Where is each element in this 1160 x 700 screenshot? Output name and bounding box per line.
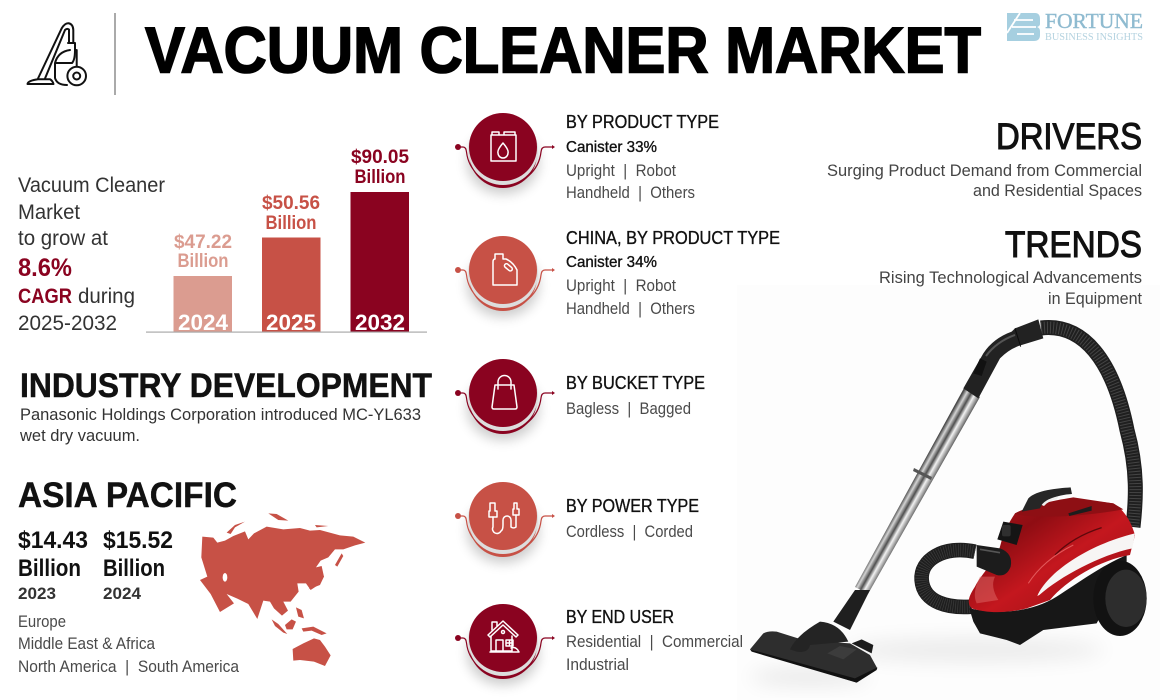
icon: detergent bottle bbox=[493, 254, 517, 285]
segment: by end user: Residential | Commercial bbox=[566, 633, 743, 651]
segment: by end user: BY END USER bbox=[566, 607, 674, 627]
stat: 2023 value bbox=[18, 527, 88, 603]
bar chart: market size: $50.56 bbox=[262, 193, 320, 214]
icon: canister with drop bbox=[491, 132, 516, 161]
text block: trends detail bbox=[879, 268, 1142, 308]
segment: china by product type: Upright | Robot bbox=[566, 277, 676, 295]
bar chart: market size: Billion bbox=[178, 251, 228, 272]
bar chart: market size: 2024 bbox=[178, 310, 229, 335]
segment: by power type: BY POWER TYPE bbox=[566, 496, 699, 516]
header divider bbox=[114, 13, 116, 95]
bar chart: market size bbox=[146, 147, 427, 335]
text block: market growth: during bbox=[78, 285, 135, 308]
text block: drivers detail: Surging Product Demand from Commercial bbox=[827, 161, 1142, 180]
segment: china by product type: CHINA, BY PRODUCT TYPE bbox=[566, 228, 780, 248]
text block: drivers detail: and Residential Spaces bbox=[973, 181, 1142, 200]
bar chart: market size: $90.05 bbox=[351, 147, 409, 168]
text block: market growth: CAGR bbox=[18, 285, 72, 308]
segment: by bucket type bbox=[455, 359, 705, 440]
text block: industry development detail: Panasonic Holdings Corporation introduced MC-YL633 bbox=[20, 405, 421, 424]
stat: 2023 value: $14.43 bbox=[18, 527, 88, 554]
bar chart: market size: Billion bbox=[266, 213, 316, 234]
stat: 2024 value: 2024 bbox=[103, 584, 142, 603]
segment: china by product type: Handheld | Others bbox=[566, 300, 695, 318]
text block: trends detail: in Equipment bbox=[1048, 289, 1142, 308]
hose handle bbox=[963, 319, 1043, 398]
stat: 2023 value: 2023 bbox=[18, 584, 56, 603]
text block: drivers detail bbox=[827, 161, 1142, 200]
segment: by end user bbox=[455, 604, 743, 685]
text block: other regions: Middle East & Africa bbox=[18, 635, 156, 653]
text block: market growth: 2025-2032 bbox=[18, 312, 117, 335]
bar chart: market size: Billion bbox=[354, 167, 406, 188]
text block: other regions: Europe bbox=[18, 613, 66, 631]
heading: trends: TRENDS bbox=[1005, 224, 1142, 265]
logo: Fortune Business Insights: BUSINESS INSIGHTS bbox=[1045, 32, 1143, 43]
text block: market growth: Market bbox=[18, 201, 80, 224]
illustration: canister vacuum cleaner bbox=[750, 319, 1147, 684]
text block: other regions bbox=[18, 613, 240, 676]
heading: asia pacific: ASIA PACIFIC bbox=[18, 476, 237, 515]
bar chart: market size: 2025 bbox=[266, 310, 316, 335]
segment: by power type bbox=[455, 482, 699, 563]
text block: industry development detail bbox=[19, 405, 421, 445]
bar chart: market size: 2032 bbox=[355, 310, 405, 335]
map: asia pacific bbox=[200, 513, 365, 666]
heading: industry development: INDUSTRY DEVELOPMENT bbox=[20, 367, 432, 405]
segment: by product type: Handheld | Others bbox=[566, 184, 695, 202]
segment: by product type: BY PRODUCT TYPE bbox=[566, 112, 719, 132]
stat: 2024 value: Billion bbox=[103, 555, 165, 582]
stat: 2024 value: $15.52 bbox=[103, 527, 173, 554]
photo background tint bbox=[737, 285, 1160, 700]
canister body bbox=[922, 487, 1147, 645]
stat: 2024 value bbox=[103, 527, 173, 603]
logo: Fortune Business Insights: FORTUNE bbox=[1045, 9, 1143, 33]
segment: by bucket type: BY BUCKET TYPE bbox=[566, 373, 705, 393]
segment: by power type: Cordless | Corded bbox=[566, 523, 693, 541]
icon: vacuum cleaner outline bbox=[28, 23, 86, 85]
stat: 2023 value: Billion bbox=[18, 555, 81, 582]
text block: industry development detail: wet dry vacuum. bbox=[19, 426, 140, 445]
icon: house bbox=[488, 621, 519, 652]
text block: market growth bbox=[18, 174, 165, 335]
floor nozzle bbox=[750, 590, 877, 683]
segment: china by product type bbox=[455, 228, 780, 318]
segment: by product type bbox=[455, 112, 719, 202]
segment: china by product type: Canister 34% bbox=[566, 254, 657, 271]
icon: power cables bbox=[489, 503, 519, 533]
segment: by end user: Industrial bbox=[566, 656, 629, 674]
bar chart: market size: $47.22 bbox=[174, 232, 232, 253]
text block: other regions: North America | South America bbox=[18, 658, 240, 676]
text block: trends detail: Rising Technological Advancements bbox=[879, 268, 1142, 287]
heading: drivers: DRIVERS bbox=[996, 116, 1142, 157]
segment: by product type: Upright | Robot bbox=[566, 162, 676, 180]
text block: market growth: 8.6% bbox=[18, 254, 72, 282]
segment: by product type: Canister 33% bbox=[566, 139, 657, 156]
logo: Fortune Business Insights bbox=[1007, 9, 1143, 43]
text block: market growth: to grow at bbox=[18, 227, 108, 250]
icon: shopping bag bbox=[492, 376, 517, 409]
text block: market growth: Vacuum Cleaner bbox=[18, 174, 165, 197]
segment: by bucket type: Bagless | Bagged bbox=[566, 400, 691, 418]
title: VACUUM CLEANER MARKET bbox=[145, 14, 981, 86]
